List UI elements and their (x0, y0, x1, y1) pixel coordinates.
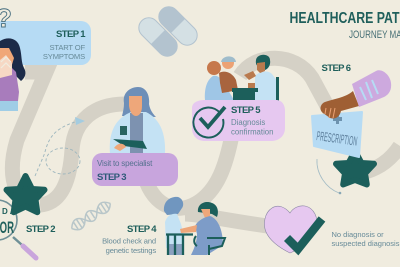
figure: woman with symptoms (0, 38, 25, 111)
title (290, 10, 400, 41)
arrow: curved dashed (317, 159, 341, 194)
step 4 text: Blood check and (102, 236, 156, 246)
step 2 label: STEP 2 (26, 224, 55, 235)
figure: specialist doctor (110, 87, 165, 154)
icon: star 2 (6, 176, 44, 212)
figure: hand with prescription (312, 70, 391, 157)
step 1 panel (0, 21, 91, 65)
step 1 panel: STEP 1 (56, 29, 86, 40)
step 3 panel: Visit to specialist (97, 159, 153, 168)
figure: doctor and patients (205, 55, 279, 105)
icon: check badge (193, 107, 225, 138)
no diagnosis text (332, 230, 400, 248)
no diagnosis text: suspected diagnosis (332, 239, 400, 248)
icon: star 6 (336, 151, 374, 184)
step 5 panel: STEP 5 (231, 105, 261, 116)
magnifier: find a doctor (0, 200, 36, 258)
step 5 panel: confirmation (231, 128, 273, 136)
step 4 text (102, 224, 157, 255)
step 3 panel (92, 153, 178, 186)
journey path (12, 58, 400, 227)
figure: blood check (164, 197, 225, 255)
step 6 label: STEP 6 (322, 63, 351, 74)
arrow: dashed loop (35, 117, 85, 176)
icon: heart with check (264, 206, 322, 253)
step 4 text: STEP 4 (127, 224, 157, 235)
step 4 text: genetic testings (106, 246, 156, 255)
step 5 panel (192, 100, 285, 141)
step 1 panel: START OF (49, 43, 86, 52)
step 1 panel: SYMPTOMS (43, 52, 85, 61)
magnifier: find a doctor: D A (2, 207, 16, 216)
step 3 panel: STEP 3 (97, 172, 126, 183)
step 5 panel: Diagnosis (231, 118, 265, 127)
no diagnosis text: No diagnosis or (332, 230, 384, 239)
pills icon (135, 3, 201, 60)
icon: DNA helix (69, 199, 113, 233)
